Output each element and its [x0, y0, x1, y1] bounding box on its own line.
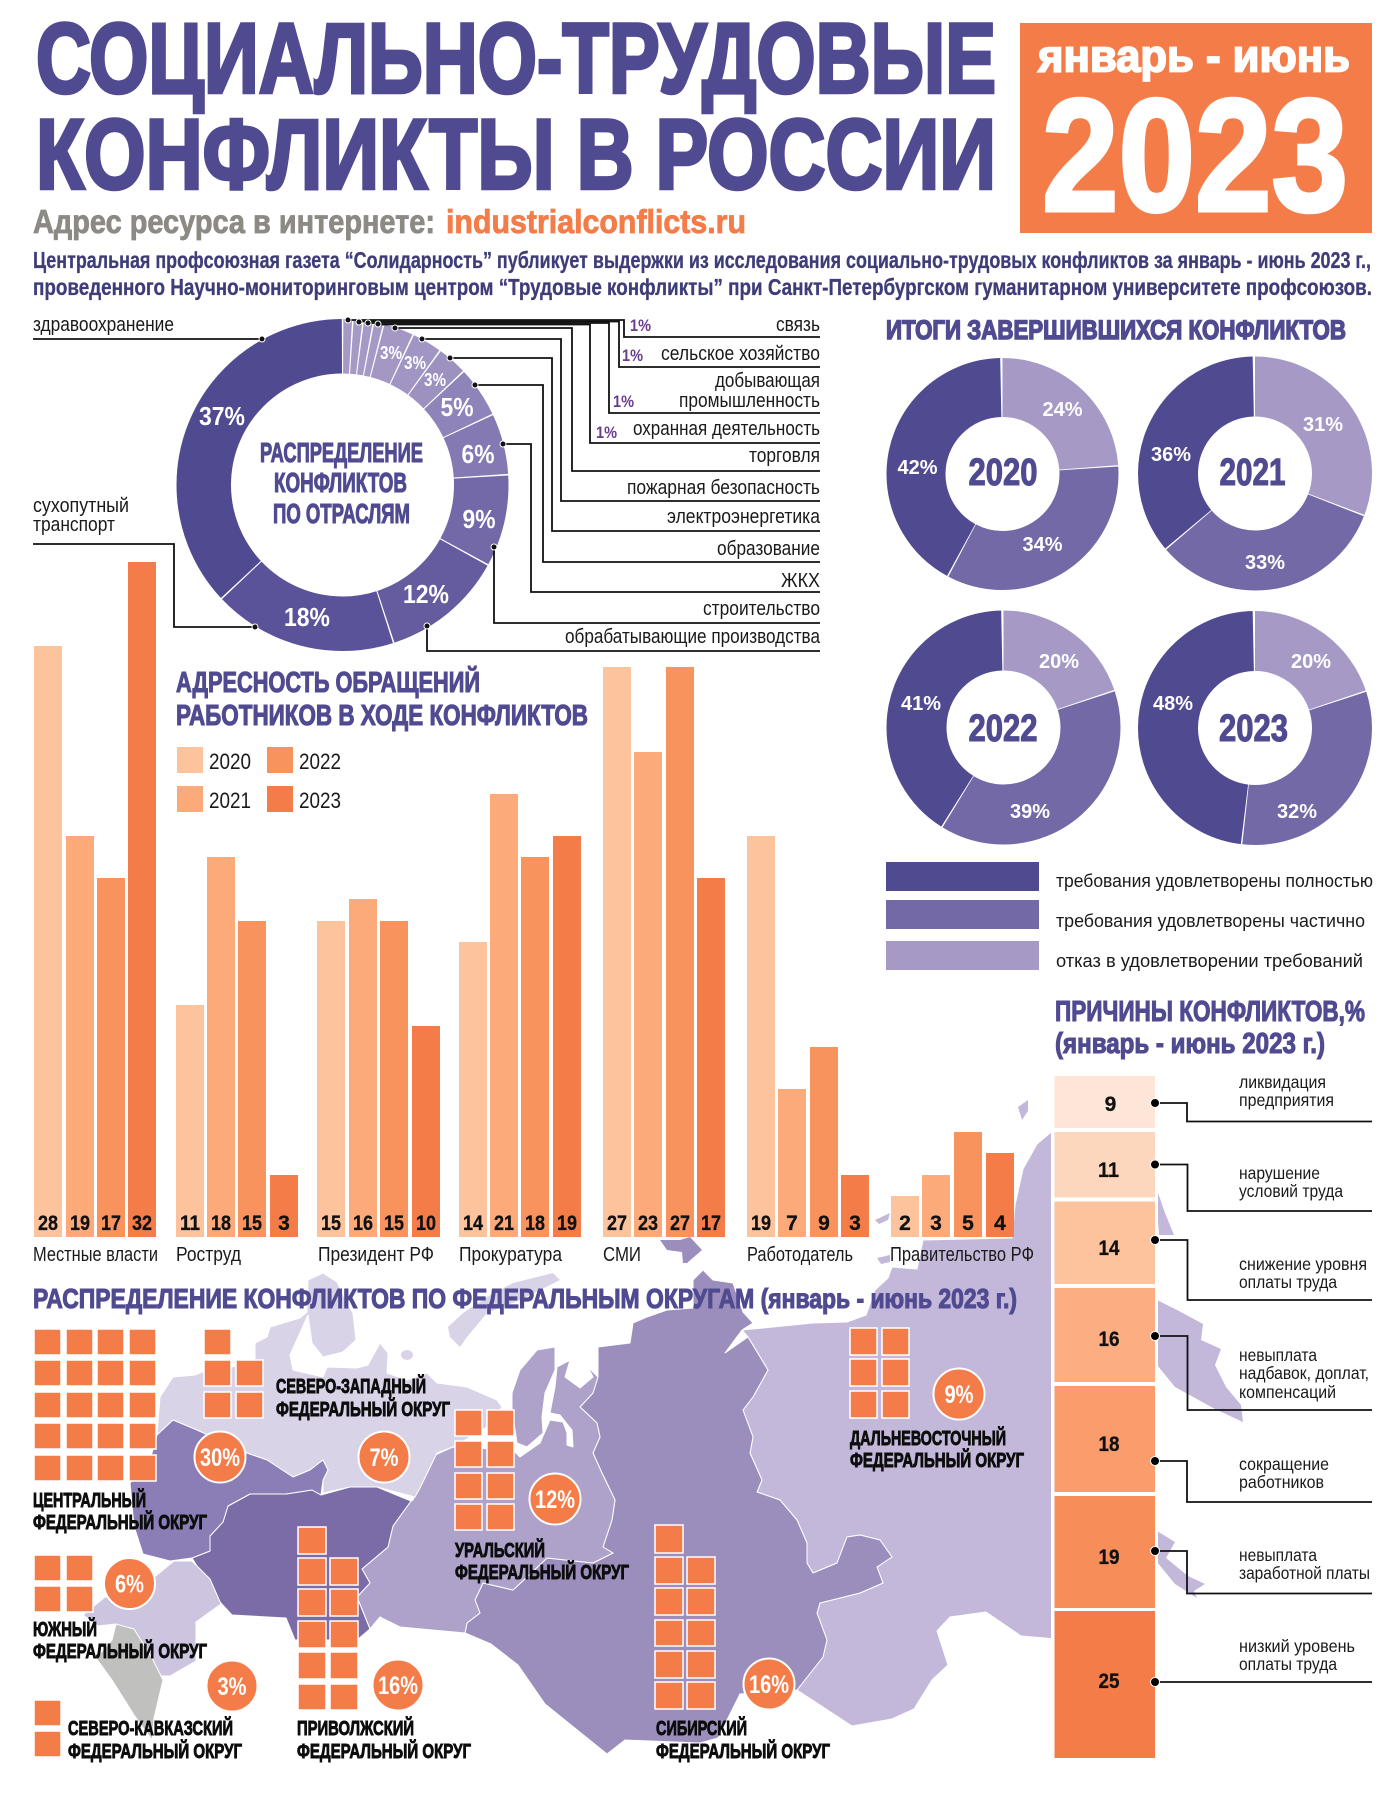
bars: Прокуратура: 18 — [525, 1212, 545, 1235]
bars: СМИ: 27 — [670, 1212, 690, 1235]
bars: Работодатель: Работодатель — [747, 1243, 853, 1266]
sector ring chart: 12% — [403, 579, 449, 609]
sector ring chart — [199, 343, 496, 632]
sector labels: строительство — [703, 597, 820, 620]
sector labels: связь — [776, 313, 820, 336]
donut 2023: 2023 — [1219, 708, 1288, 750]
district: Северо-Кавказский: 3% — [218, 1673, 246, 1701]
bars: Президент РФ — [317, 899, 440, 1266]
sector labels: транспорт — [33, 513, 116, 536]
bars: Роструд: Роструд — [176, 1243, 241, 1266]
district: Сибирский — [655, 1525, 830, 1763]
sector labels: сельское хозяйство — [661, 342, 820, 365]
sector labels: промышленность — [679, 389, 820, 412]
sector labels: охранная деятельность — [633, 417, 820, 440]
bars legend: 2021 — [209, 788, 251, 813]
bars: Местные власти: 32 — [132, 1212, 152, 1235]
district: Северо-Западный: ФЕДЕРАЛЬНЫЙ ОКРУГ — [276, 1397, 450, 1421]
district: Центральный: 30% — [200, 1444, 240, 1472]
sector ring chart: КОНФЛИКТОВ — [274, 467, 407, 498]
district: Сибирский: ФЕДЕРАЛЬНЫЙ ОКРУГ — [656, 1739, 830, 1763]
district: Центральный: ФЕДЕРАЛЬНЫЙ ОКРУГ — [33, 1510, 207, 1534]
bars: Президент РФ: Президент РФ — [318, 1243, 434, 1266]
sector ring chart: 37% — [199, 401, 245, 431]
bars: Правительство РФ: 2 — [899, 1212, 911, 1235]
district: Уральский: 12% — [535, 1486, 575, 1514]
donut 2020: 34% — [1022, 534, 1063, 556]
donut 2023: 20% — [1291, 651, 1331, 673]
causes column: 11 — [1098, 1159, 1119, 1182]
bars: СМИ: 27 — [607, 1212, 627, 1235]
causes labels: работников — [1239, 1472, 1324, 1492]
bars: Местные власти: Местные власти — [33, 1243, 158, 1266]
sector labels: обрабатывающие производства — [565, 625, 820, 648]
district: Уральский — [455, 1410, 629, 1584]
bars: Работодатель — [747, 836, 869, 1266]
bars: Правительство РФ: Правительство РФ — [890, 1243, 1034, 1266]
bars: Прокуратура: 14 — [463, 1212, 483, 1235]
heading: appeals — [176, 665, 588, 732]
district: Южный: 6% — [115, 1570, 144, 1598]
title: СОЦИАЛЬНО-ТРУДОВЫЕ — [36, 2, 996, 114]
donut 2021: 2021 — [1220, 452, 1286, 494]
donut 2021: 33% — [1245, 552, 1285, 574]
intro text — [33, 247, 1372, 300]
donut 2020: 24% — [1042, 399, 1083, 421]
district: Дальневосточный — [850, 1328, 1024, 1472]
sector labels: 1% — [596, 423, 617, 442]
district: Приволжский: ПРИВОЛЖСКИЙ — [297, 1716, 414, 1740]
bars: Работодатель: 19 — [751, 1212, 771, 1235]
district: Северо-Западный — [204, 1329, 450, 1482]
heading: appeals: АДРЕСНОСТЬ ОБРАЩЕНИЙ — [176, 665, 480, 699]
donut 2023: 48% — [1153, 693, 1193, 715]
sector labels: электроэнергетика — [667, 505, 821, 528]
causes column: 9 — [1105, 1093, 1116, 1116]
donut 2021 — [1151, 386, 1343, 574]
outcomes legend: требования удовлетворены частично — [1056, 911, 1365, 931]
bars legend — [177, 747, 341, 813]
sector ring chart: 3% — [380, 343, 402, 363]
bars: Президент РФ: 16 — [353, 1212, 373, 1235]
district: Северо-Западный: 7% — [370, 1444, 398, 1472]
bars: Местные власти — [33, 562, 158, 1266]
bars: Правительство РФ: 5 — [962, 1212, 974, 1235]
donut 2022: 20% — [1039, 651, 1079, 673]
sector ring chart: РАСПРЕДЕЛЕНИЕ — [260, 437, 423, 468]
causes labels: снижение уровня — [1239, 1254, 1367, 1274]
sector labels: ЖКХ — [781, 569, 820, 592]
sector labels: 1% — [622, 346, 643, 365]
district: Уральский: УРАЛЬСКИЙ — [455, 1538, 545, 1562]
bars: Прокуратура: 19 — [557, 1212, 577, 1235]
district: Дальневосточный: ФЕДЕРАЛЬНЫЙ ОКРУГ — [850, 1448, 1024, 1472]
donut 2020: 42% — [898, 457, 938, 479]
sector ring chart: 18% — [284, 602, 330, 632]
district: Северо-Кавказский: ФЕДЕРАЛЬНЫЙ ОКРУГ — [68, 1739, 242, 1763]
district: Приволжский: 16% — [378, 1672, 418, 1700]
sector labels: добывающая — [715, 369, 820, 392]
donut 2020 — [898, 388, 1089, 560]
bars: Роструд — [176, 857, 298, 1266]
sector labels: сухопутный — [33, 494, 129, 517]
district: Центральный: ЦЕНТРАЛЬНЫЙ — [33, 1488, 146, 1512]
bars: Прокуратура: 21 — [494, 1212, 514, 1235]
district: Дальневосточный: 9% — [944, 1381, 974, 1409]
bars legend: 2022 — [299, 749, 341, 774]
heading: appeals: РАБОТНИКОВ В ХОДЕ КОНФЛИКТОВ — [176, 700, 588, 732]
district: Южный — [33, 1555, 207, 1663]
district: Приволжский — [297, 1527, 471, 1763]
bars: Местные власти: 28 — [38, 1212, 58, 1235]
outcomes legend: требования удовлетворены полностью — [1056, 871, 1373, 891]
donut 2022: 2022 — [968, 708, 1038, 750]
donut 2021: 31% — [1303, 414, 1343, 436]
bars: Роструд: 18 — [211, 1212, 231, 1235]
causes column: 18 — [1098, 1433, 1120, 1456]
causes labels: невыплата — [1239, 1345, 1317, 1365]
bars: Местные власти: 17 — [101, 1212, 121, 1235]
sector leader lines — [33, 317, 820, 651]
causes labels: ликвидация — [1239, 1072, 1326, 1092]
bars: СМИ — [603, 667, 725, 1266]
causes labels: оплаты труда — [1239, 1272, 1337, 1292]
causes labels — [1239, 1072, 1370, 1674]
period badge: январь - июнь 2023: 2023 — [1042, 66, 1348, 244]
bars: Местные власти: 19 — [70, 1212, 90, 1235]
sector labels — [33, 313, 821, 648]
district: Уральский: ФЕДЕРАЛЬНЫЙ ОКРУГ — [455, 1560, 629, 1584]
heading: districts: РАСПРЕДЕЛЕНИЕ КОНФЛИКТОВ ПО ФЕДЕРАЛЬНЫМ ОКРУГАМ (январь - июнь 2023 г.) — [33, 1283, 1017, 1314]
causes labels: невыплата — [1239, 1545, 1317, 1565]
district: Северо-Западный: СЕВЕРО-ЗАПАДНЫЙ — [276, 1374, 426, 1398]
causes labels: оплаты труда — [1239, 1654, 1337, 1674]
bars: Роструд: 11 — [180, 1212, 200, 1235]
sector labels: образование — [717, 537, 820, 560]
website line — [33, 203, 746, 240]
causes labels: предприятия — [1239, 1090, 1334, 1110]
sector labels: 1% — [630, 316, 651, 335]
bars: Роструд: 15 — [242, 1212, 262, 1235]
district: Приволжский: ФЕДЕРАЛЬНЫЙ ОКРУГ — [297, 1739, 471, 1763]
bars: Работодатель: 9 — [818, 1212, 830, 1235]
website line: industrialconflicts.ru — [446, 203, 746, 240]
bars: СМИ: 17 — [701, 1212, 721, 1235]
causes labels: сокращение — [1239, 1454, 1329, 1474]
sector ring chart: 9% — [462, 504, 496, 534]
causes column — [1051, 1074, 1158, 1760]
sector labels: здравоохранение — [33, 313, 174, 336]
bars: Работодатель: 7 — [786, 1212, 798, 1235]
bars: Президент РФ: 15 — [321, 1212, 341, 1235]
bars legend: 2023 — [299, 788, 341, 813]
sector labels: 1% — [613, 392, 634, 411]
district: Центральный — [33, 1329, 246, 1534]
district: Южный: ЮЖНЫЙ — [33, 1617, 97, 1641]
bars: Правительство РФ — [890, 1132, 1034, 1266]
outcomes legend — [886, 862, 1373, 971]
donut 2023: 32% — [1277, 801, 1317, 823]
district: Сибирский: 16% — [749, 1671, 789, 1699]
donut 2021: 36% — [1151, 444, 1191, 466]
sector ring chart: 6% — [462, 439, 494, 469]
outcomes legend: отказ в удовлетворении требований — [1056, 951, 1363, 971]
sector ring chart: ПО ОТРАСЛЯМ — [273, 498, 410, 529]
sector labels: пожарная безопасность — [627, 476, 820, 499]
causes column: 25 — [1098, 1670, 1120, 1693]
bars: СМИ: 23 — [638, 1212, 658, 1235]
bars: Прокуратура — [459, 794, 581, 1266]
title — [36, 2, 996, 210]
bars: Президент РФ: 10 — [416, 1212, 436, 1235]
district: Северо-Кавказский — [34, 1660, 258, 1763]
bars: Работодатель: 3 — [849, 1212, 861, 1235]
period badge: январь - июнь 2023: январь - июнь — [1037, 30, 1350, 82]
causes labels: нарушение — [1239, 1163, 1320, 1183]
causes column: 14 — [1098, 1237, 1120, 1260]
causes labels: компенсаций — [1239, 1382, 1336, 1402]
heading: causes: (январь - июнь 2023 г.) — [1055, 1028, 1325, 1060]
bars legend: 2020 — [209, 749, 251, 774]
title: КОНФЛИКТЫ В РОССИИ — [36, 98, 996, 210]
donut 2022: 41% — [901, 693, 941, 715]
bars: СМИ: СМИ — [603, 1243, 641, 1266]
bars: Роструд: 3 — [278, 1212, 290, 1235]
bars: Правительство РФ: 3 — [930, 1212, 942, 1235]
causes column: 19 — [1098, 1546, 1120, 1569]
donut 2020: 2020 — [968, 452, 1038, 494]
donut 2023 — [1153, 641, 1342, 823]
bars: Прокуратура: Прокуратура — [459, 1243, 562, 1266]
sector ring chart: 3% — [404, 353, 426, 373]
causes labels: надбавок, доплат, — [1239, 1363, 1369, 1383]
heading: causes — [1055, 996, 1365, 1060]
donut 2022 — [901, 640, 1090, 823]
map of Russia by federal districts — [83, 1100, 1243, 1754]
district: Северо-Кавказский: СЕВЕРО-КАВКАЗСКИЙ — [68, 1716, 233, 1740]
causes labels: условий труда — [1239, 1181, 1343, 1201]
district: Южный: ФЕДЕРАЛЬНЫЙ ОКРУГ — [33, 1639, 207, 1663]
bars: Правительство РФ: 4 — [994, 1212, 1006, 1235]
sector ring chart: 5% — [440, 392, 474, 422]
bars: Президент РФ: 15 — [384, 1212, 404, 1235]
district: Дальневосточный: ДАЛЬНЕВОСТОЧНЫЙ — [850, 1426, 1006, 1450]
causes column: 16 — [1098, 1328, 1120, 1351]
sector labels: торговля — [749, 444, 820, 467]
causes labels: заработной платы — [1239, 1563, 1370, 1583]
sector ring chart: 3% — [424, 370, 446, 390]
causes leader lines — [1150, 1098, 1372, 1686]
website line: Адрес ресурса в интернете: — [33, 203, 435, 240]
district: Сибирский: СИБИРСКИЙ — [656, 1716, 747, 1740]
donut 2022: 39% — [1010, 801, 1050, 823]
causes labels: низкий уровень — [1239, 1636, 1355, 1656]
